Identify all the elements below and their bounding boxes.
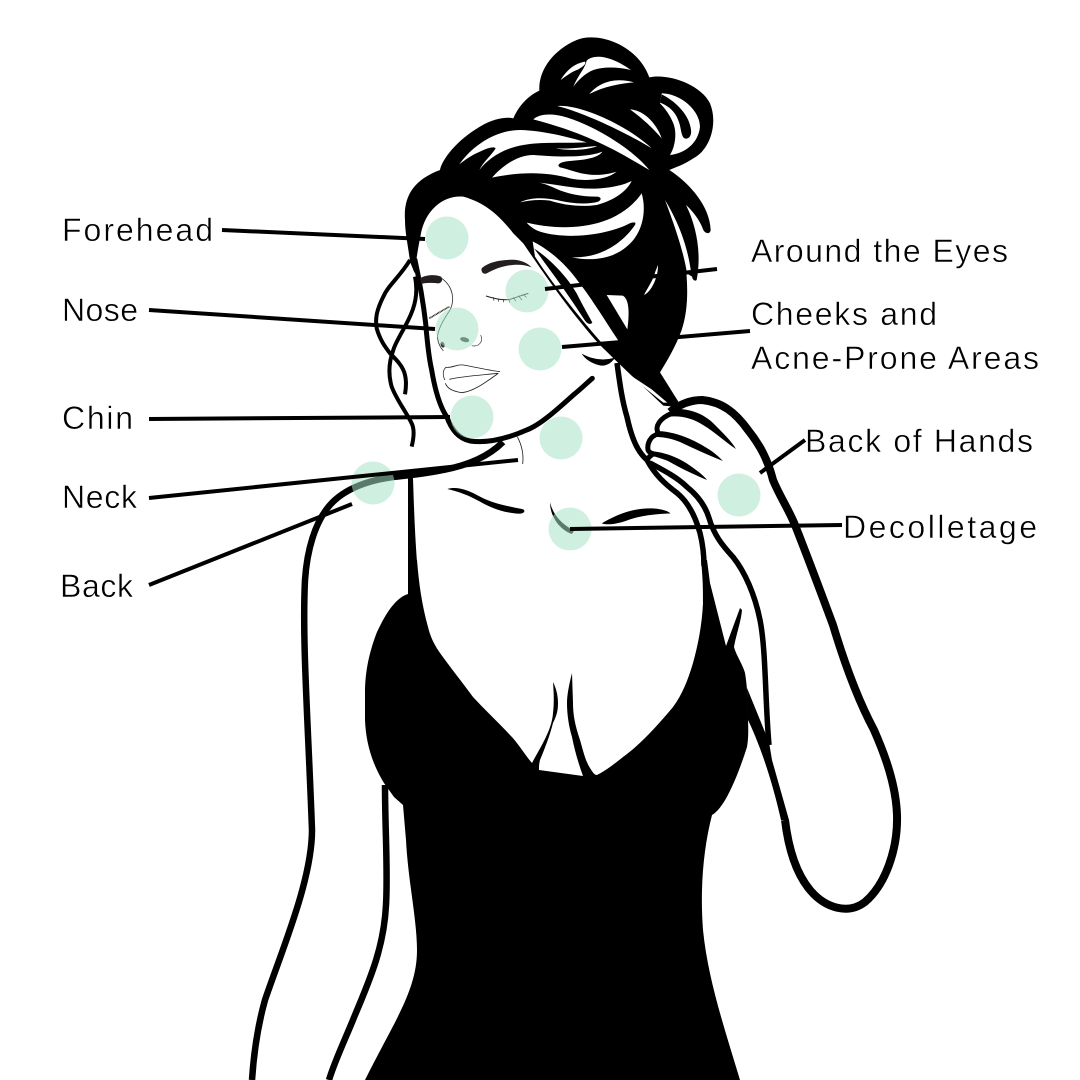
lower sliver	[622, 370, 667, 403]
marker: cheek	[518, 328, 562, 370]
label: cheeks and: Cheeks and	[751, 296, 937, 332]
labels	[60, 212, 1039, 604]
forearm inner line	[650, 463, 769, 745]
label: neck: Neck	[62, 479, 138, 515]
forearm wedge	[747, 688, 789, 820]
label: forehead: Forehead	[62, 212, 213, 248]
neck crease	[517, 437, 523, 464]
leader: chin	[149, 417, 450, 419]
leader: forehead	[222, 230, 425, 239]
illustration: woman	[252, 37, 897, 1080]
label: acne-prone areas: Acne-Prone Areas	[751, 340, 1039, 376]
hair: crown highlights	[459, 130, 632, 206]
eyelash: left	[429, 307, 449, 318]
left curl strand	[376, 260, 410, 394]
treatment area markers	[352, 216, 760, 550]
label: nose: Nose	[62, 292, 138, 328]
fingers	[647, 409, 736, 480]
nose wing	[472, 335, 482, 346]
lips	[443, 365, 500, 393]
leader: decolletage	[570, 525, 842, 529]
wrist and neck line	[617, 363, 704, 566]
leader: around the eyes	[545, 269, 717, 289]
hair: face-side highlights and strand	[533, 241, 667, 403]
face details	[376, 260, 671, 534]
label: chin: Chin	[62, 400, 133, 436]
marker: around the eyes	[506, 270, 548, 312]
marker: back of hands	[718, 474, 760, 516]
tapered strand	[534, 248, 592, 324]
nostril: left	[440, 341, 446, 348]
leader: nose	[149, 310, 435, 329]
collarbone: centre	[550, 502, 574, 534]
hair: lower mass and main strand	[520, 238, 687, 407]
marker: decolletage	[548, 508, 592, 550]
collarbone: left	[447, 488, 524, 514]
marker: neck	[540, 416, 582, 460]
leader: back of hands	[760, 440, 805, 473]
highlight between strands	[533, 241, 621, 344]
hair: lower crescent and right strand highlights	[527, 193, 691, 273]
leader: neck	[149, 460, 518, 498]
body: left arm outline	[252, 442, 503, 1080]
second curl strand	[389, 277, 416, 447]
window gap	[607, 295, 629, 329]
collarbone: right	[602, 508, 671, 524]
nose outline	[437, 278, 453, 351]
label: around the eyes: Around the Eyes	[751, 233, 1008, 269]
label: decolletage: Decolletage	[843, 509, 1037, 545]
face outline	[415, 260, 592, 442]
small gap	[644, 265, 658, 295]
label: back of hands: Back of Hands	[805, 423, 1033, 459]
body: torso side	[329, 785, 387, 1080]
leader: back	[149, 504, 352, 585]
marker: forehead	[426, 216, 468, 260]
strap	[408, 478, 417, 596]
leader lines	[149, 230, 842, 585]
eyebrow: left	[420, 275, 442, 284]
hair: bun highlights	[533, 57, 700, 170]
eyebrow: right	[481, 260, 532, 274]
marker: back	[352, 462, 394, 504]
leader: cheeks	[562, 331, 750, 347]
right arm and hand outline	[670, 400, 897, 909]
eye: closed with lashes	[486, 293, 528, 302]
marker: nose	[436, 308, 478, 350]
label: back: Back	[60, 568, 134, 604]
nostril: right	[460, 336, 470, 343]
hair: top and bun black shape with highlights	[405, 37, 713, 281]
ear	[582, 354, 615, 366]
marker: chin	[450, 396, 494, 438]
hair: black silhouette	[405, 37, 713, 281]
dress	[365, 560, 748, 1080]
